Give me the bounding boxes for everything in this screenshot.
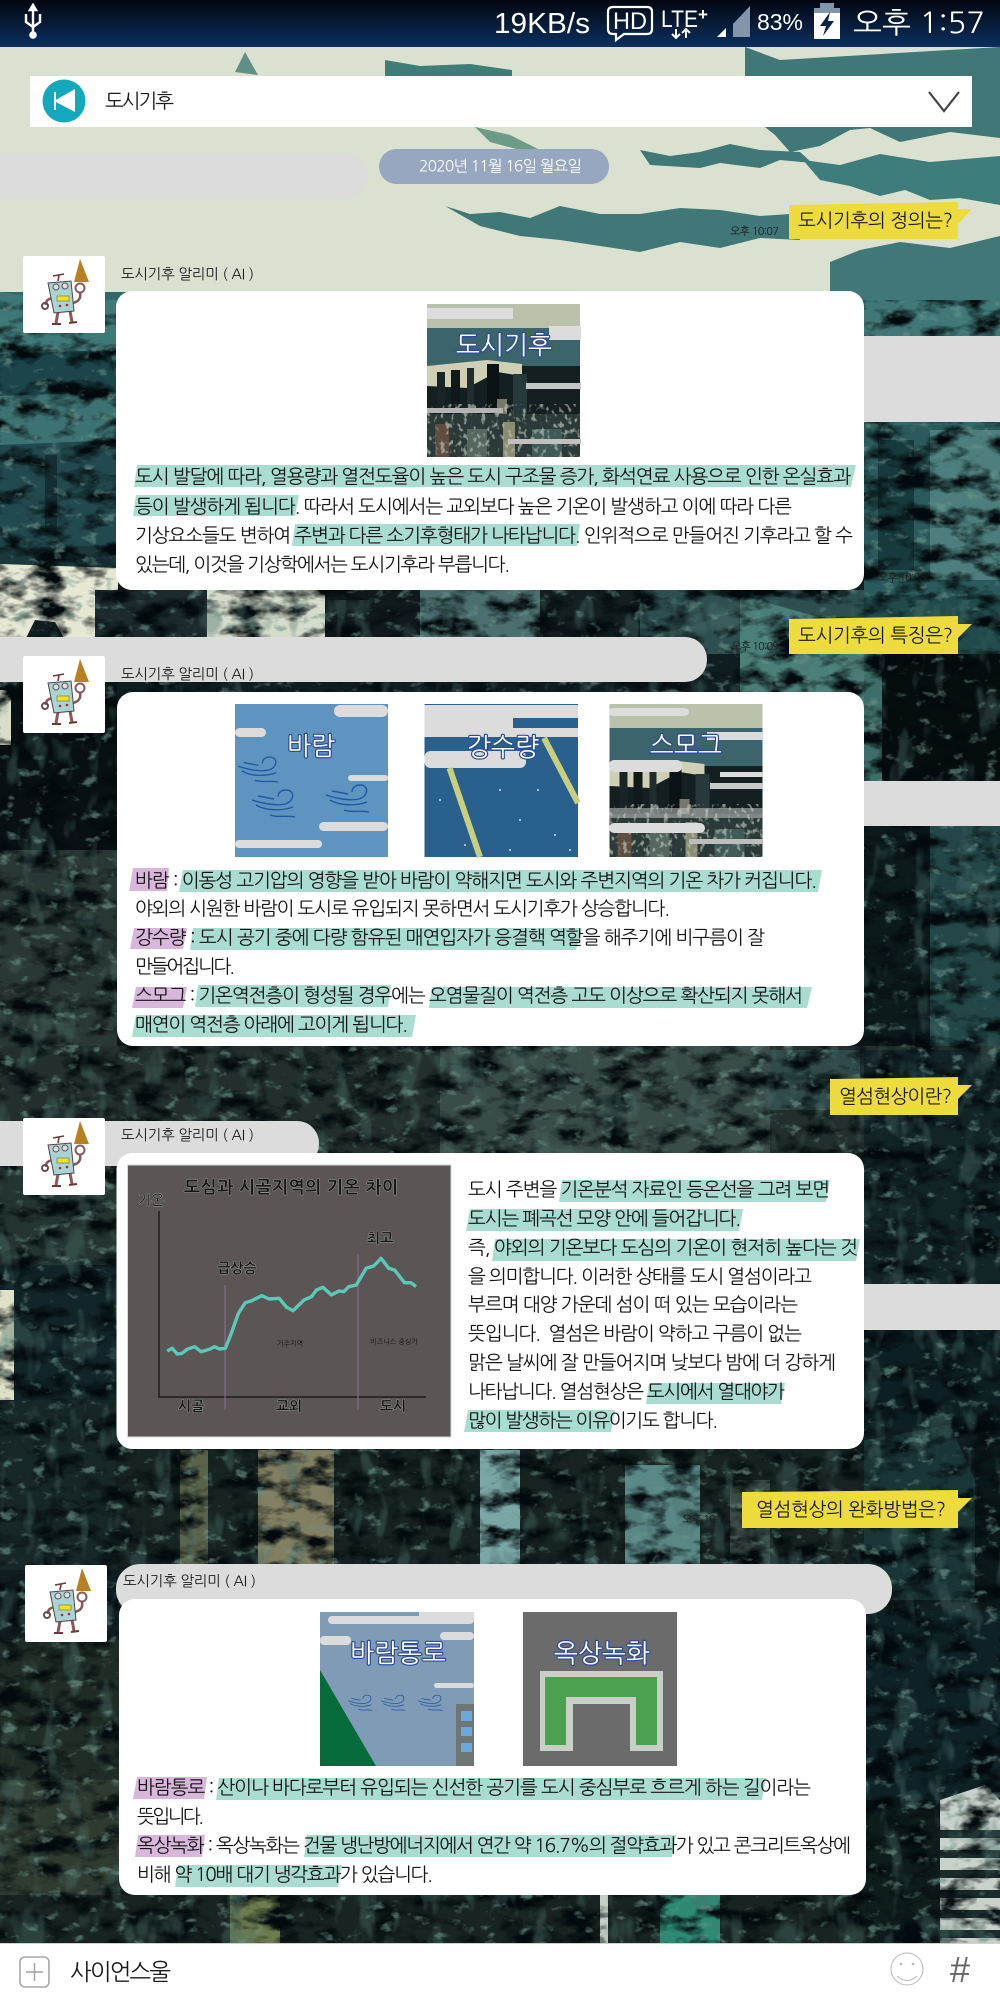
timestamp 3: 오후 10:09 bbox=[731, 641, 779, 652]
chart: urban vs rural temperature: 교외 bbox=[276, 1399, 302, 1414]
panel: heat island card bbox=[116, 1153, 864, 1449]
avatar 4 bbox=[25, 1565, 107, 1642]
timestamp 1: 오후 10:07 bbox=[730, 226, 779, 237]
icon: smile bbox=[891, 1953, 923, 1985]
gray band: top left bbox=[0, 153, 367, 199]
thumbnail: wind bbox=[235, 704, 388, 857]
chart: urban vs rural temperature: 비즈니스 중심가 bbox=[370, 1338, 418, 1346]
panel: characteristics card bbox=[117, 692, 864, 1046]
thumbnail: wind: 바람 bbox=[287, 733, 335, 759]
thumbnail: smog bbox=[609, 704, 763, 857]
gray band: right 3 bbox=[840, 1284, 1000, 1330]
thumbnail: wind corridor: 바람통로 bbox=[350, 1640, 446, 1666]
characteristics text: 매연이 역전층 아래에 고이게 됩니다. bbox=[135, 1015, 408, 1034]
timestamp 4: 오후 10:10 bbox=[682, 1514, 730, 1525]
chart: urban vs rural temperature: 기온 bbox=[138, 1193, 164, 1208]
thumbnail: precipitation bbox=[424, 704, 578, 857]
heat island text: 부르며 대양 가운데 섬이 떠 있는 모습이라는 bbox=[468, 1295, 798, 1314]
characteristics text: 바람 : 이동성 고기압의 영향을 받아 바람이 약해지면 도시와 주변지역의 기온 차가 커집니다. bbox=[135, 871, 817, 890]
icon: hash: # bbox=[950, 1949, 970, 1990]
panel: definition card bbox=[116, 291, 864, 590]
thumbnail: smog: 스모그 bbox=[650, 732, 722, 758]
clock: 오후 1:57 bbox=[853, 9, 985, 38]
highlights bbox=[133, 1777, 766, 1887]
mitigation text: 바람통로 : 산이나 바다로부터 유입되는 신선한 공기를 도시 중심부로 흐르게 하는 길이라는 bbox=[137, 1778, 811, 1797]
mitigation text: 옥상녹화 : 옥상녹화는 건물 냉난방에너지에서 연간 약 16.7%의 절약효과가 있고 콘크리트옥상에 bbox=[137, 1836, 851, 1855]
heat island text: 많이 발생하는 이유이기도 합니다. bbox=[468, 1411, 718, 1430]
chat header bar bbox=[30, 76, 972, 127]
thumbnail: wind corridor bbox=[320, 1612, 474, 1766]
icon: plus box bbox=[20, 1957, 49, 1987]
highlights bbox=[133, 465, 856, 546]
question bubble 4: 열섬현상의 완화방법은? bbox=[756, 1500, 946, 1519]
avatar 1 bbox=[23, 256, 105, 333]
icon: lte: + bbox=[698, 5, 708, 24]
input bar bbox=[0, 1943, 1000, 2000]
timestamp 2: 오후 10:08 bbox=[878, 572, 926, 583]
mitigation text: 비해 약 10배 대기 냉각효과가 있습니다. bbox=[137, 1865, 433, 1884]
input text: 사이언스울 bbox=[70, 1960, 171, 1984]
thumbnail: precipitation: 강수량 bbox=[467, 734, 539, 760]
heat island text: 도시 주변을 기온분석 자료인 등온선을 그려 보면 bbox=[468, 1180, 830, 1199]
definition text: 있는데, 이것을 기상학에서는 도시기후라 부릅니다. bbox=[135, 555, 510, 574]
panel: mitigation card bbox=[119, 1599, 866, 1895]
thumbnail: rooftop greening bbox=[523, 1612, 677, 1766]
chart: urban vs rural temperature: 도심과 시골지역의 기온 차이 bbox=[184, 1178, 398, 1196]
mitigation text: 뜻입니다. bbox=[137, 1807, 204, 1826]
avatar 2 bbox=[23, 656, 105, 733]
chart: urban vs rural temperature: 거주지역 bbox=[277, 1340, 303, 1348]
sender name 2: 도시기후 알리미 ( AI ) bbox=[121, 666, 254, 682]
sender name 4: 도시기후 알리미 ( AI ) bbox=[123, 1573, 256, 1589]
chart: urban vs rural temperature: 도시 bbox=[380, 1399, 406, 1414]
heat island text bbox=[468, 1180, 858, 1430]
sender name 1: 도시기후 알리미 ( AI ) bbox=[121, 266, 254, 282]
gray band: left 2 bbox=[0, 637, 707, 682]
characteristics text: 야외의 시원한 바람이 도시로 유입되지 못하면서 도시기후가 상승합니다. bbox=[135, 899, 670, 918]
heat island text: 맑은 날씨에 잘 만들어지며 낮보다 밤에 더 강하게 bbox=[468, 1353, 836, 1372]
definition text: 등이 발생하게 됩니다. 따라서 도시에서는 교외보다 높은 기온이 발생하고 이에 따라 다른 bbox=[135, 497, 792, 516]
chart: urban vs rural temperature: 급상승 bbox=[217, 1261, 257, 1276]
icon: signal bbox=[717, 6, 750, 37]
heat island text: 을 의미합니다. 이러한 상태를 도시 열섬이라고 bbox=[468, 1267, 812, 1286]
characteristics text: 스모그 : 기온역전층이 형성될 경우에는 오염물질이 역전층 고도 이상으로 확산되지 못해서 bbox=[135, 986, 803, 1005]
characteristics text: 강수량 : 도시 공기 중에 다량 함유된 매연입자가 응결핵 역할을 해주기에 비구름이 잘 bbox=[135, 928, 765, 947]
chat title: 도시기후 bbox=[105, 91, 174, 111]
question bubble 3: 열섬현상이란? bbox=[839, 1087, 952, 1106]
definition text bbox=[135, 467, 853, 574]
characteristics text bbox=[135, 871, 817, 1034]
thumbnail: city: 도시기후 bbox=[456, 332, 552, 358]
icon: usb bbox=[26, 5, 40, 38]
icon: chevron bbox=[929, 92, 959, 111]
gray band: right 2 bbox=[840, 781, 1000, 826]
mitigation text bbox=[137, 1778, 851, 1884]
date pill: 2020년 11월 16일 월요일 bbox=[419, 158, 582, 174]
icon: hd voice bbox=[608, 7, 652, 40]
heat island text: 나타납니다. 열섬현상은 도시에서 열대야가 bbox=[468, 1382, 785, 1401]
highlights bbox=[129, 868, 822, 1037]
icon: battery bbox=[814, 3, 840, 39]
network speed: 19KB/s bbox=[494, 8, 590, 40]
question bubble 2 bbox=[789, 616, 972, 654]
battery percent: 83% bbox=[757, 9, 803, 35]
question bubble 1 bbox=[789, 202, 972, 239]
thumbnail: rooftop greening: 옥상녹화 bbox=[554, 1640, 650, 1666]
definition text: 도시 발달에 따라, 열용량과 열전도율이 높은 도시 구조물 증가, 화석연료 사용으로 인한 온실효과 bbox=[135, 467, 851, 486]
icon: back button bbox=[42, 80, 86, 122]
chart: urban vs rural temperature: 최고 bbox=[367, 1231, 393, 1246]
question bubble 3 bbox=[830, 1077, 972, 1115]
status bar bbox=[0, 0, 1000, 47]
highlights bbox=[464, 1180, 860, 1432]
chart: urban vs rural temperature bbox=[128, 1165, 451, 1437]
gray band: right 1 bbox=[840, 336, 1000, 422]
icon: hd voice: HD bbox=[613, 8, 647, 35]
avatar 3 bbox=[23, 1118, 105, 1195]
sender name 3: 도시기후 알리미 ( AI ) bbox=[121, 1127, 254, 1143]
chart: urban vs rural temperature: 시골 bbox=[178, 1399, 204, 1414]
definition text: 기상요소들도 변하여 주변과 다른 소기후형태가 나타납니다. 인위적으로 만들어진 기후라고 할 수 bbox=[135, 526, 853, 545]
heat island text: 뜻입니다. 열섬은 바람이 약하고 구름이 없는 bbox=[468, 1324, 802, 1343]
icon: lte: LTE bbox=[661, 6, 698, 33]
question bubble 4 bbox=[742, 1490, 972, 1528]
heat island text: 도시는 폐곡선 모양 안에 들어갑니다. bbox=[468, 1209, 741, 1228]
characteristics text: 만들어집니다. bbox=[135, 957, 235, 976]
gray band: left 3 bbox=[0, 1121, 319, 1166]
date pill bbox=[379, 149, 609, 184]
question bubble 2: 도시기후의 특징은? bbox=[798, 626, 953, 645]
question bubble 1: 도시기후의 정의는? bbox=[798, 211, 953, 230]
thumbnail: city bbox=[427, 304, 581, 457]
gray band: left 4 bbox=[116, 1564, 892, 1614]
heat island text: 즉, 야외의 기온보다 도심의 기온이 현저히 높다는 것 bbox=[468, 1238, 858, 1257]
